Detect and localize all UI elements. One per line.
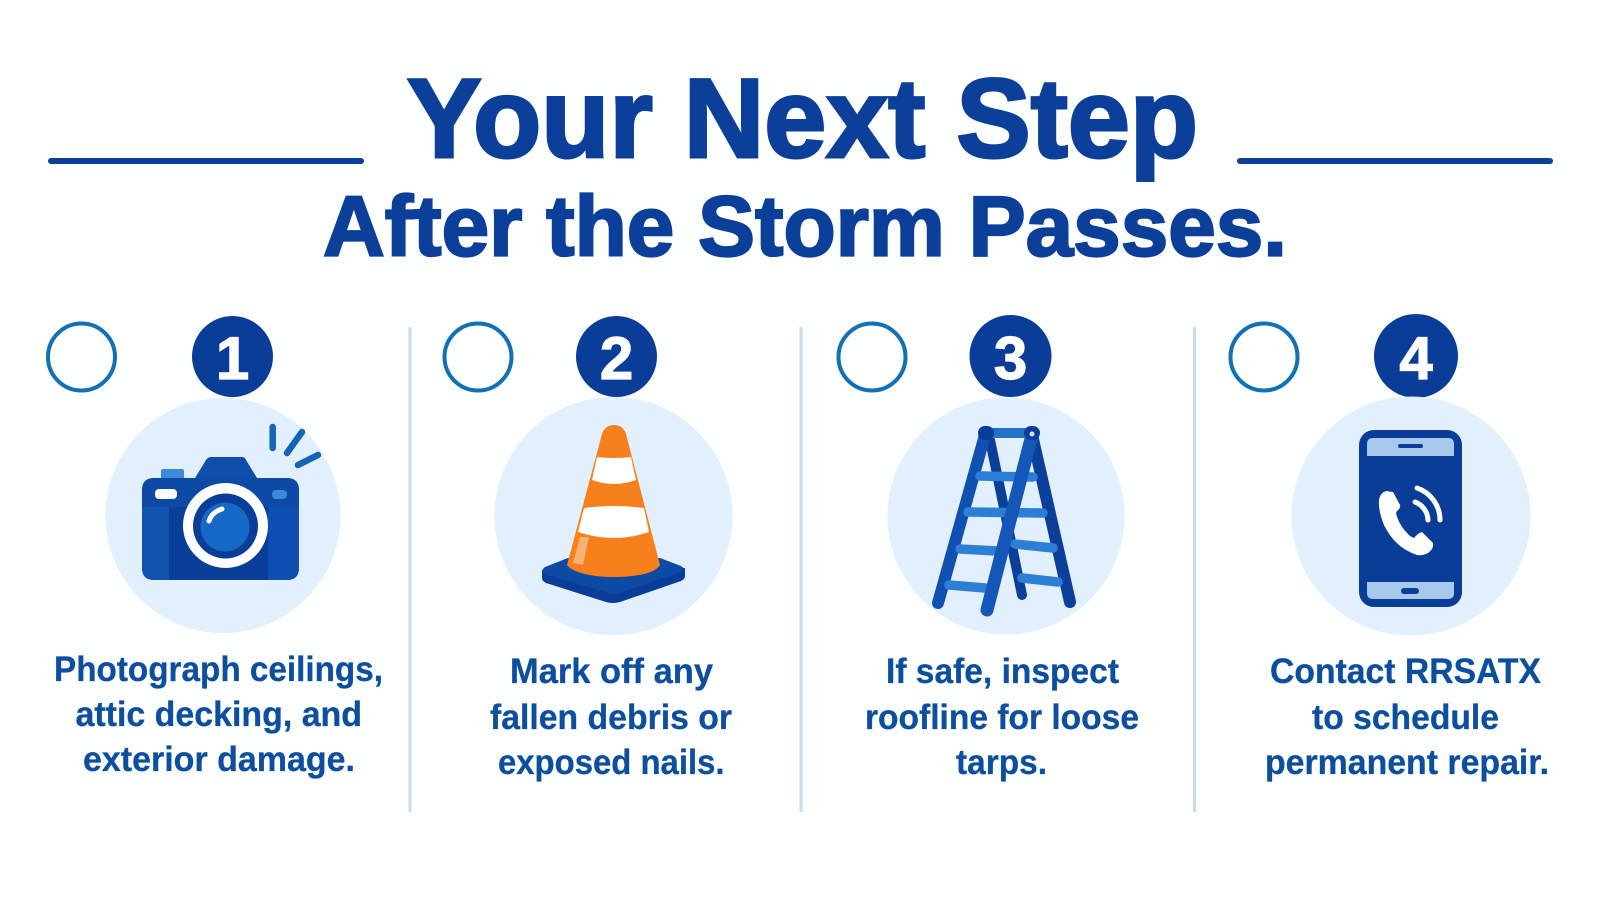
panel: step 2 mark debris xyxy=(444,316,732,782)
icon: ladder xyxy=(938,426,1070,610)
empty checkbox ring 1 xyxy=(48,324,115,390)
title: your next step: Your Next Step xyxy=(407,56,1198,181)
text: step 3: If safe, inspect xyxy=(886,652,1119,691)
subtitle: After the Storm Passes. xyxy=(323,180,1287,274)
number badge 2: 2 xyxy=(600,325,633,392)
text: step 1: attic decking, and xyxy=(76,695,362,734)
panel: step 3 inspect roofline xyxy=(838,315,1139,782)
text: step 4: permanent repair. xyxy=(1265,743,1549,782)
text: step 3: tarps. xyxy=(956,743,1047,782)
empty checkbox ring 3 xyxy=(838,324,906,390)
text: step 1 xyxy=(54,650,383,779)
text: step 3 xyxy=(865,652,1139,782)
empty checkbox ring 2 xyxy=(444,324,512,390)
icon circle 2 xyxy=(494,397,732,635)
text: step 4: Contact RRSATX xyxy=(1270,652,1542,691)
text: step 1: exterior damage. xyxy=(83,740,355,779)
icon: traffic cone xyxy=(542,425,685,603)
number badge 1: 1 xyxy=(216,325,249,392)
panel: step 4 contact RRSATX xyxy=(1230,314,1549,782)
icon circle 1 xyxy=(106,398,340,633)
number badge 2 xyxy=(576,316,657,397)
text: step 2: fallen debris or xyxy=(490,698,732,737)
text: step 3: roofline for loose xyxy=(865,698,1139,737)
text: step 4 xyxy=(1265,652,1549,782)
empty checkbox ring 4 xyxy=(1230,324,1298,390)
number badge 1 xyxy=(192,316,273,397)
number badge 4: 4 xyxy=(1399,325,1433,392)
number badge 4 xyxy=(1374,314,1458,398)
icon: smartphone with call xyxy=(1359,430,1462,607)
number badge 3 xyxy=(970,315,1052,397)
icon: camera xyxy=(142,427,318,580)
panel: step 1 photograph damage xyxy=(48,316,383,779)
icon circle 4 xyxy=(1292,396,1530,636)
text: step 2 xyxy=(490,652,732,782)
text: step 2: exposed nails. xyxy=(498,743,724,782)
text: step 1: Photograph ceilings, xyxy=(54,650,383,689)
text: step 2: Mark off any xyxy=(510,652,714,691)
text: step 4: to schedule xyxy=(1312,698,1499,737)
icon circle 3 xyxy=(888,398,1124,634)
number badge 3: 3 xyxy=(994,325,1027,392)
